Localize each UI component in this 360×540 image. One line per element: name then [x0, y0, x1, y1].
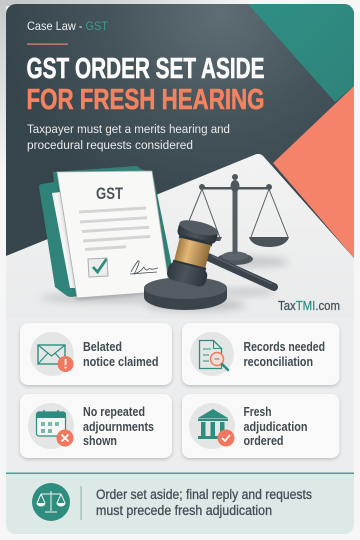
subtitle: Taxpayer must get a merits hearing and — [27, 122, 230, 136]
card: no repeated adjournments — [20, 394, 172, 458]
card: no repeated adjournments: No repeated — [83, 405, 145, 419]
card: records reconciliation — [182, 323, 340, 385]
illustration: gavel — [144, 217, 275, 311]
card: no repeated adjournments: shown — [83, 434, 117, 448]
coral triangle — [273, 86, 354, 258]
icon: document with magnifier — [200, 340, 228, 370]
icon: calendar with cross — [36, 410, 74, 446]
title: FOR FRESH HEARING — [26, 84, 264, 116]
panel: conclusion footer — [6, 472, 354, 534]
illustration: scales — [187, 174, 289, 267]
icon: scales badge — [32, 483, 70, 521]
card: fresh adjudication: Fresh — [244, 405, 272, 419]
card: belated notice: notice claimed — [83, 355, 158, 369]
card: belated notice: Belated — [83, 340, 122, 354]
panel: conclusion footer: must precede fresh adjudication — [96, 503, 272, 518]
card: fresh adjudication: adjudication — [244, 420, 308, 434]
card: fresh adjudication — [182, 394, 340, 458]
card: no repeated adjournments: adjournments — [83, 420, 154, 434]
light floor shape — [6, 154, 354, 330]
subtitle — [27, 122, 230, 152]
brand: TaxTMI.com — [278, 299, 340, 313]
gavel handle — [208, 257, 274, 287]
card: records reconciliation: reconciliation — [244, 355, 313, 369]
teal corner shape — [248, 4, 354, 102]
checkbox — [88, 258, 108, 277]
panel: page body — [6, 318, 354, 474]
title: GST ORDER SET ASIDE — [26, 53, 264, 85]
illustration: document with folder — [39, 166, 180, 303]
title — [26, 53, 264, 116]
icon: envelope with alert — [38, 345, 74, 372]
card: fresh adjudication: ordered — [244, 434, 284, 448]
eyebrow label: Case Law - GST — [27, 19, 109, 33]
panel: conclusion footer: Order set aside; final reply and requests — [96, 487, 312, 502]
panel: hero — [6, 4, 354, 330]
gavel head — [166, 217, 220, 288]
card: records reconciliation: Records needed — [244, 340, 325, 354]
subtitle: procedural requests considered — [27, 138, 193, 152]
signature — [130, 261, 158, 274]
document heading: GST — [96, 184, 123, 203]
icon: courthouse with check — [198, 409, 234, 446]
card: belated notice — [20, 323, 172, 385]
